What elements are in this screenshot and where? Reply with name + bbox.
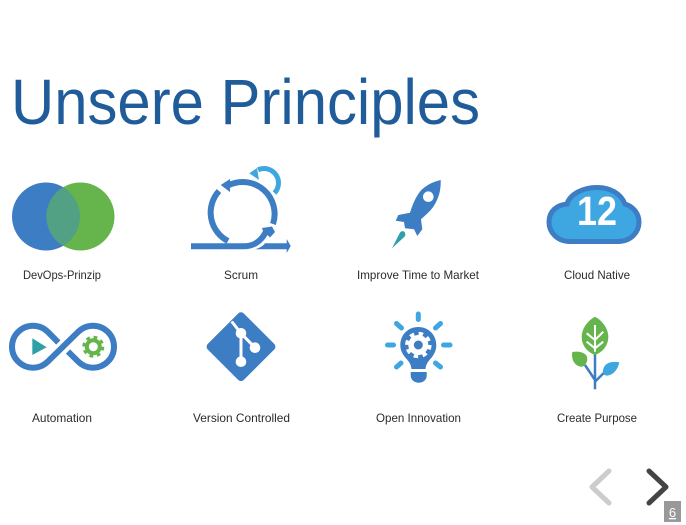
label: Cloud Native: Cloud Native <box>564 268 630 282</box>
icon: cloud with number 12 <box>549 188 639 242</box>
arrow: next <box>649 471 666 503</box>
label: Create Purpose: Create Purpose <box>557 411 637 425</box>
page number badge: 6 <box>669 505 676 520</box>
icon: git diamond <box>205 311 277 383</box>
label: Open Innovation: Open Innovation <box>376 411 461 425</box>
label: Version Controlled: Version Controlled <box>193 411 290 425</box>
icon: rocket <box>392 180 441 248</box>
page number badge <box>664 501 681 522</box>
label: Scrum: Scrum <box>224 268 258 282</box>
label: DevOps-Prinzip: DevOps-Prinzip <box>23 268 101 282</box>
arrow: previous <box>592 471 609 503</box>
label: Improve Time to Market: Improve Time to Market <box>357 268 480 282</box>
icon: automation infinity loop <box>12 326 114 368</box>
label: Automation: Automation <box>32 411 92 425</box>
icon: plant with leaves <box>572 317 619 389</box>
icon: devops venn diagram <box>12 182 114 250</box>
icon: innovation light bulb <box>388 314 450 383</box>
title: Unsere Principles <box>11 66 480 138</box>
icon: scrum cycle <box>191 168 291 253</box>
icon: cloud with number 12: 12 <box>577 188 617 234</box>
